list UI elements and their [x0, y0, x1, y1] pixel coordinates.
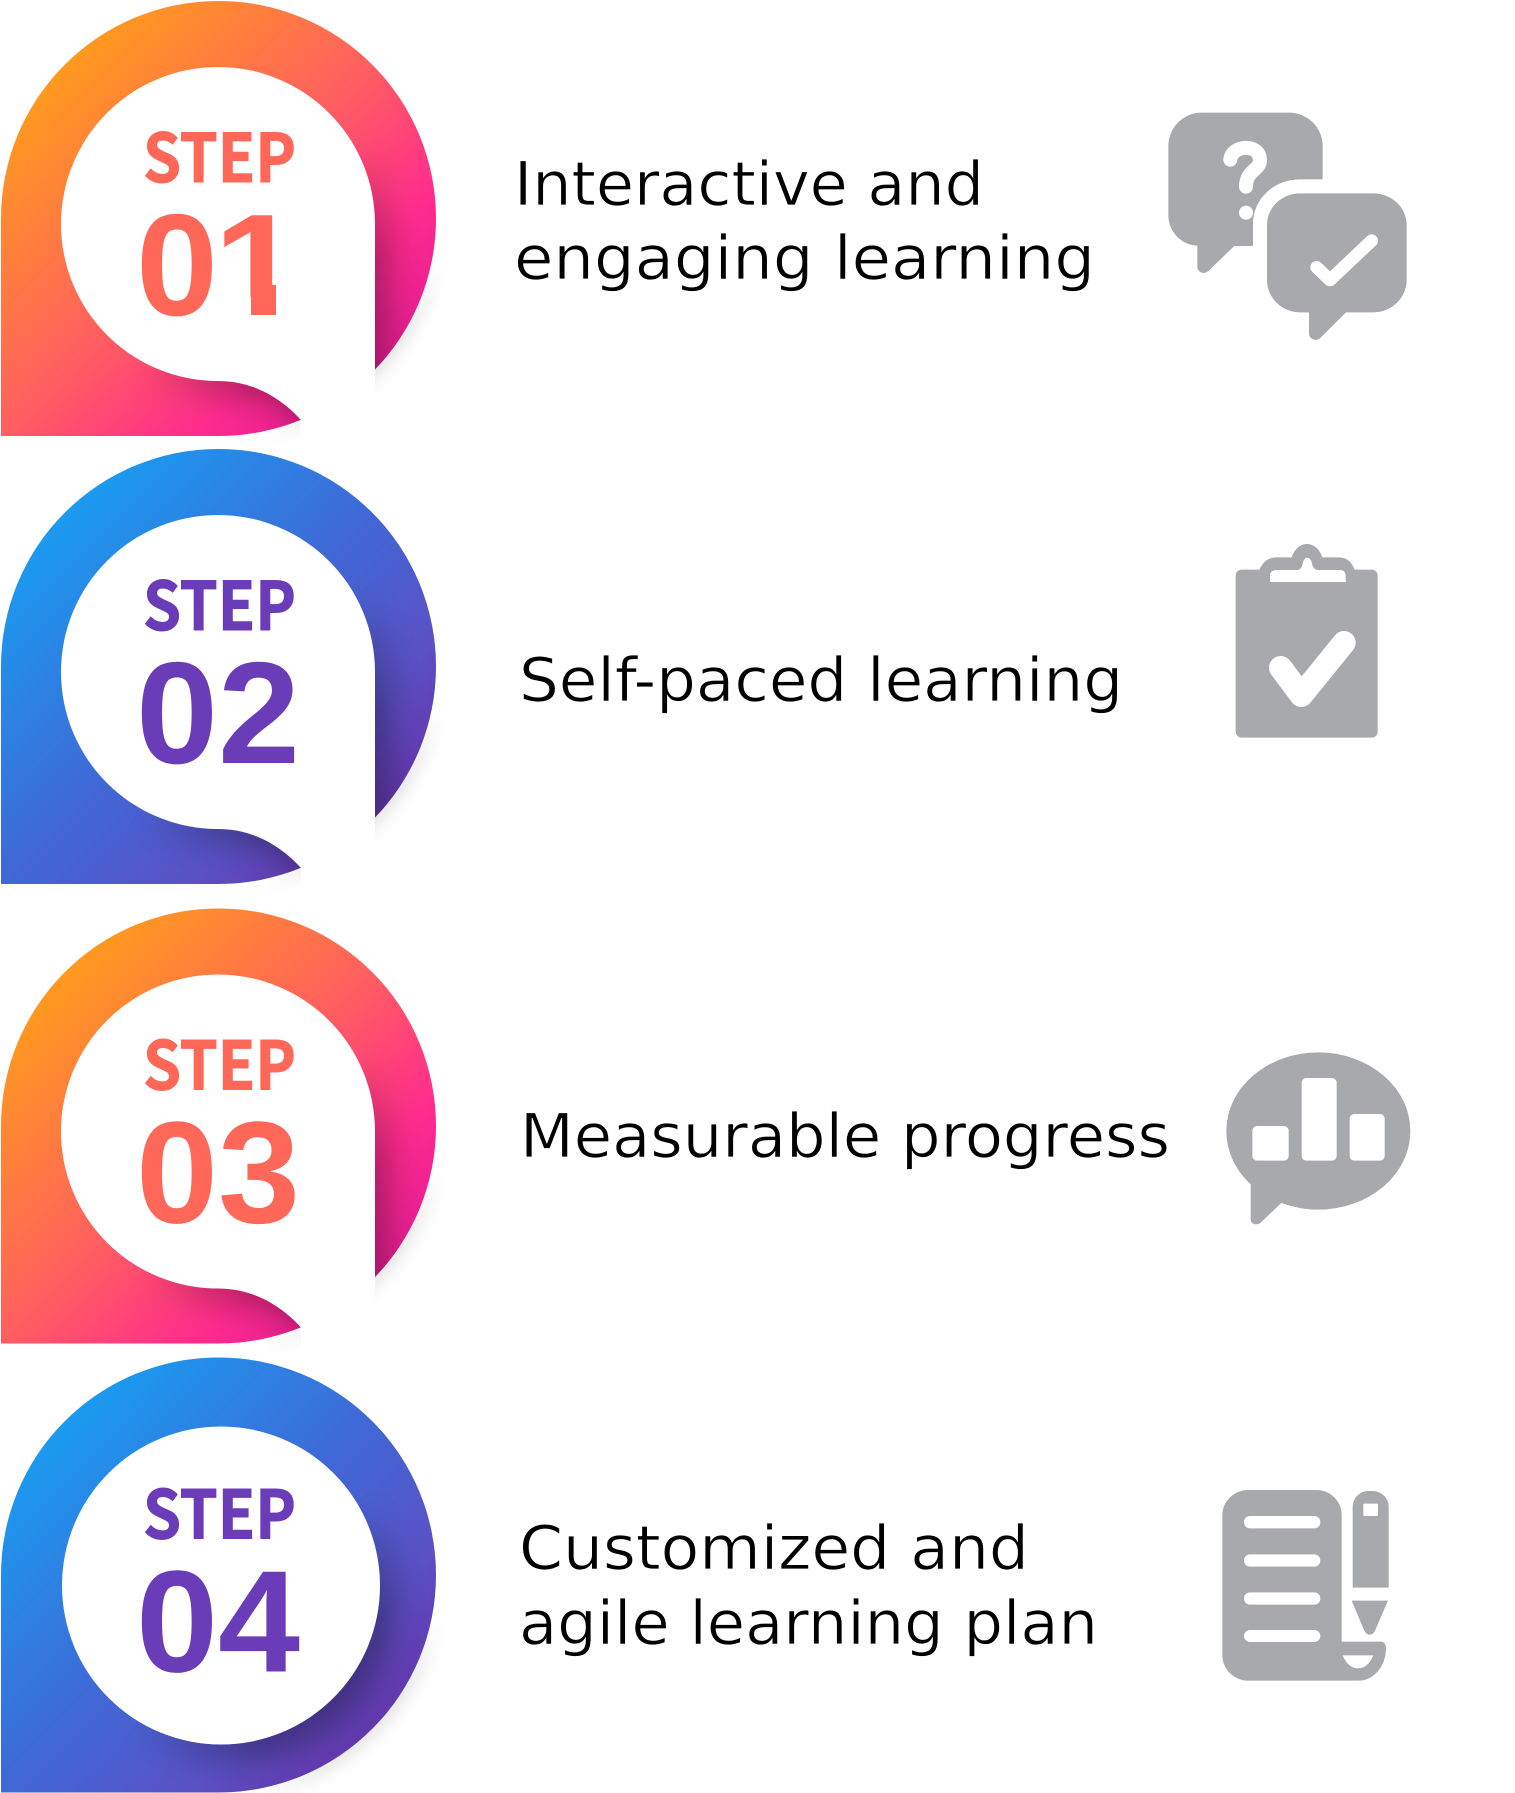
step 3 number: 03	[136, 1092, 300, 1254]
step 1 number: 1	[214, 184, 302, 346]
step 3 label: STEP	[143, 1012, 296, 1110]
step 2 row	[1, 449, 1378, 907]
step 1 row	[1, 1, 1407, 459]
step 2 badge	[1, 449, 441, 907]
icon: document and pencil	[1222, 1490, 1389, 1681]
icon: clipboard with check	[1236, 544, 1378, 738]
step 2 label: STEP	[143, 553, 296, 650]
step 4 label: STEP	[143, 1462, 296, 1558]
step 1 text: engaging learning	[514, 223, 1095, 294]
step 4 row	[1, 1358, 1389, 1793]
step 3 badge	[1, 908, 441, 1366]
step 4 text: agile learning plan	[519, 1588, 1098, 1659]
step 4 number: 04	[136, 1540, 300, 1702]
step 1 number	[136, 184, 311, 346]
step 3 row	[1, 908, 1410, 1366]
step 1 number: 0	[136, 184, 218, 346]
step 2 number: 02	[136, 632, 300, 794]
step 4 badge	[1, 1358, 441, 1793]
step 2 text: Self-paced learning	[519, 645, 1123, 716]
step 1 text: Interactive and	[514, 149, 984, 220]
step 1 label: STEP	[143, 105, 296, 202]
icon: speech bubble with bar chart	[1226, 1052, 1410, 1224]
step 3 text: Measurable progress	[520, 1101, 1170, 1172]
step 4 text: Customized and	[519, 1513, 1029, 1584]
step 1 text	[514, 149, 1095, 294]
icon: question and check speech bubbles	[1168, 113, 1407, 340]
step 4 text	[519, 1513, 1098, 1659]
step 1 badge	[1, 1, 441, 459]
